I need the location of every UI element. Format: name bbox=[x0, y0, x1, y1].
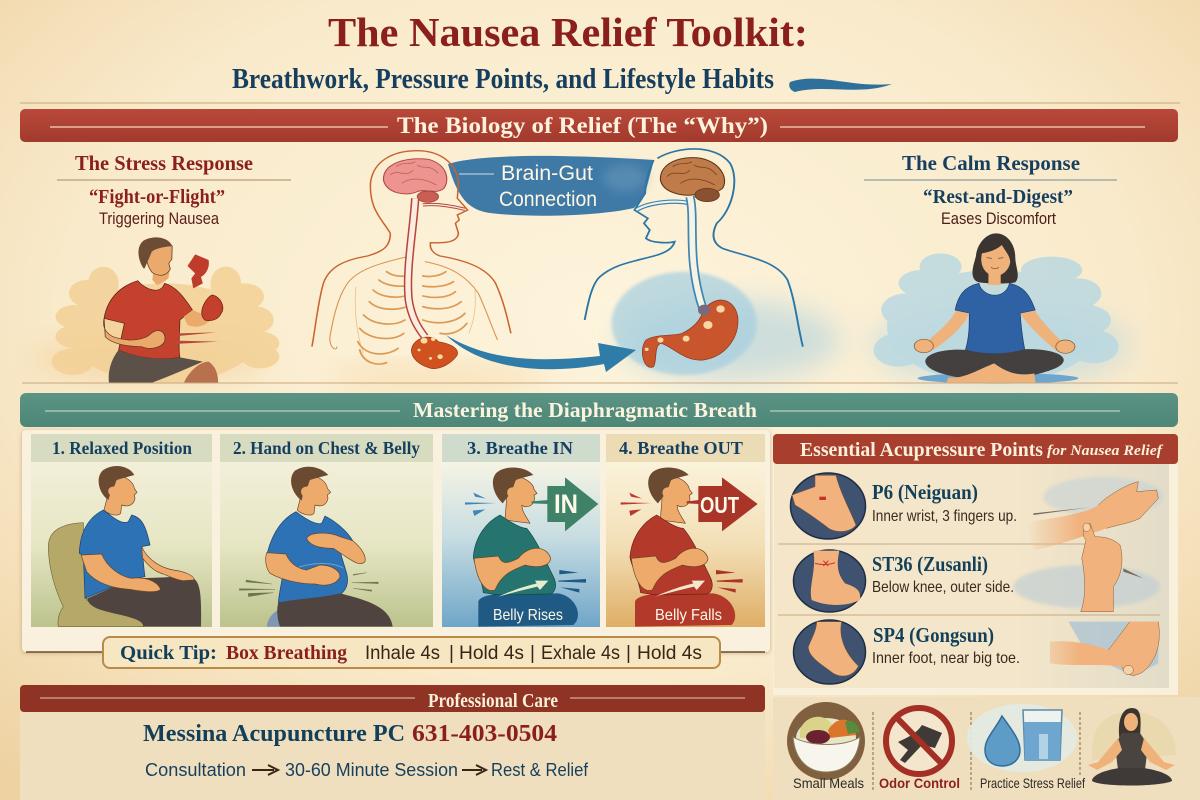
point: SP4: Inner foot, near big toe. bbox=[872, 650, 1020, 667]
quick tip bar: | bbox=[626, 643, 631, 664]
habit labels bbox=[793, 775, 1085, 791]
illustration: pressing wrist bbox=[1013, 477, 1163, 612]
background washes bbox=[30, 300, 1130, 392]
panel: lifestyle habits bbox=[773, 697, 1200, 800]
quick tip bar: Exhale 4s bbox=[541, 643, 620, 664]
step 2 card: hand on chest and belly bbox=[220, 434, 433, 627]
illustration: pressing foot bbox=[1050, 622, 1159, 677]
section header: breath: Mastering the Diaphragmatic Breath bbox=[413, 398, 757, 422]
acupressure header bbox=[773, 434, 1178, 464]
point: P6: P6 (Neiguan) bbox=[872, 480, 978, 504]
callout: brain-gut connection: Brain-Gut bbox=[501, 162, 593, 185]
point: ST36: Below knee, outer side. bbox=[872, 579, 1014, 596]
point: P6 bbox=[790, 473, 1017, 539]
care flow: Rest & Relief bbox=[491, 760, 589, 780]
step 1 card: relaxed position bbox=[31, 434, 212, 627]
acupressure header: for Nausea Relief bbox=[1047, 443, 1164, 459]
calm response heading bbox=[864, 151, 1117, 228]
callout: brain-gut connection bbox=[448, 156, 654, 216]
point: ST36: ST36 (Zusanli) bbox=[872, 552, 988, 576]
clinic name and phone bbox=[143, 721, 557, 747]
step 4 card: breathe out: OUT bbox=[700, 492, 739, 518]
point: P6: Inner wrist, 3 fingers up. bbox=[872, 508, 1017, 525]
illustration: calm anatomy with brain and stomach bbox=[585, 149, 803, 375]
stress response heading: The Stress Response bbox=[75, 151, 253, 175]
quick tip bar: Hold 4s bbox=[459, 643, 524, 664]
decorative blue swoosh bbox=[789, 79, 892, 92]
habit labels: Small Meals bbox=[793, 775, 864, 791]
quick tip bar: | bbox=[530, 643, 535, 664]
section header: biology bbox=[20, 109, 1178, 142]
step 4 card: breathe out: 4. Breathe OUT bbox=[619, 438, 743, 458]
quick tip bar: Hold 4s bbox=[637, 643, 702, 664]
point: ST36 bbox=[794, 550, 1014, 612]
quick tip bar bbox=[26, 637, 765, 668]
title: The Nausea Relief Toolkit: bbox=[328, 9, 808, 55]
point: SP4 bbox=[794, 620, 1020, 684]
step 3 card: breathe in: 3. Breathe IN bbox=[467, 438, 573, 458]
calm response heading: “Rest-and-Digest” bbox=[923, 186, 1073, 208]
icon: practice stress relief meditation bbox=[1088, 708, 1176, 786]
step 3 card: breathe in: Belly Rises bbox=[493, 607, 563, 624]
quick tip bar: | bbox=[449, 643, 454, 664]
subtitle: Breathwork, Pressure Points, and Lifestyle Habits bbox=[232, 64, 774, 95]
icon: small meals bowl bbox=[787, 702, 865, 780]
step 4 card: breathe out: Belly Falls bbox=[655, 607, 722, 624]
calm response heading: The Calm Response bbox=[902, 151, 1080, 175]
stress response heading: Triggering Nausea bbox=[99, 209, 219, 228]
care flow: 30-60 Minute Session bbox=[285, 760, 458, 780]
calm response heading: Eases Discomfort bbox=[941, 209, 1056, 228]
habit labels: Odor Control bbox=[879, 775, 960, 791]
step 4 card: breathe out bbox=[606, 434, 765, 627]
arrow: brain to gut bbox=[446, 335, 636, 372]
care panel background bbox=[20, 712, 765, 800]
section header: biology: The Biology of Relief (The “Why”) bbox=[397, 113, 768, 138]
panel: acupressure points bbox=[773, 434, 1178, 695]
clinic name and phone: Messina Acupuncture PC bbox=[143, 721, 405, 747]
point: SP4: SP4 (Gongsun) bbox=[873, 623, 994, 647]
habit labels: Practice Stress Relief bbox=[980, 775, 1085, 791]
care flow bbox=[145, 760, 589, 780]
section header: breath bbox=[20, 393, 1178, 427]
acupressure header: Essential Acupressure Points bbox=[800, 439, 1043, 461]
step 2 card: hand on chest and belly: 2. Hand on Chest & Belly bbox=[233, 438, 420, 458]
section header: professional care bbox=[20, 685, 765, 712]
stress response heading: “Fight-or-Flight” bbox=[89, 186, 225, 208]
icon: odor control prohibition bbox=[886, 708, 952, 774]
illustration: calm woman meditating bbox=[874, 233, 1119, 384]
quick tip bar: Quick Tip: bbox=[120, 642, 217, 664]
stress response heading bbox=[57, 151, 291, 228]
illustration: stress anatomy with brain and stomach bbox=[312, 151, 511, 369]
illustration: stressed man bbox=[52, 237, 279, 383]
care flow: Consultation bbox=[145, 760, 246, 780]
clinic name and phone: 631-403-0504 bbox=[412, 721, 557, 747]
quick tip bar: Inhale 4s bbox=[365, 643, 440, 664]
title block bbox=[232, 9, 892, 95]
section: biology of relief bbox=[20, 109, 1178, 392]
quick tip bar: Box Breathing bbox=[226, 642, 347, 664]
step 3 card: breathe in: IN bbox=[554, 489, 578, 519]
section: professional care bbox=[20, 685, 765, 800]
panel: steps background bbox=[22, 430, 770, 652]
icon: water drop and glass bbox=[967, 704, 1077, 772]
section header: professional care: Professional Care bbox=[428, 690, 558, 712]
callout: brain-gut connection: Connection bbox=[499, 188, 597, 211]
section: diaphragmatic breath bbox=[20, 393, 1178, 668]
step 1 card: relaxed position: 1. Relaxed Position bbox=[52, 438, 192, 458]
step 3 card: breathe in bbox=[442, 434, 600, 627]
